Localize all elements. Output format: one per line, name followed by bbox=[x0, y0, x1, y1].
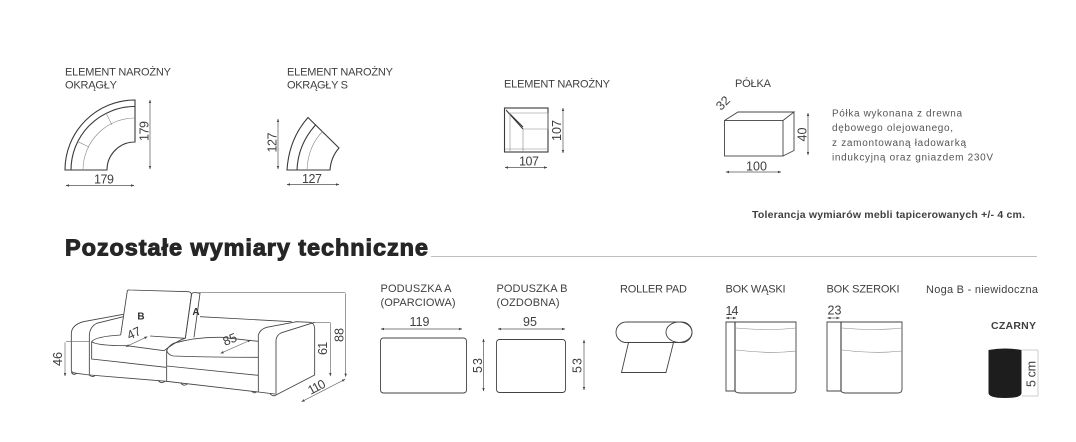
sofa dimension labels: 47 bbox=[125, 324, 143, 343]
dimension: height 40 bbox=[796, 113, 810, 155]
panel: polka bbox=[713, 77, 993, 174]
label: roller pad: ROLLER PAD bbox=[620, 284, 687, 296]
sofa dimension labels bbox=[51, 324, 346, 398]
drawing: round corner element S bbox=[287, 118, 339, 170]
panel: bok waski bbox=[726, 284, 796, 393]
drawing: corner element bbox=[504, 108, 548, 152]
dimension: width 100: 100 bbox=[746, 160, 767, 174]
section heading: Pozostałe wymiary techniczne bbox=[65, 234, 428, 260]
dimension: height 107: 107 bbox=[550, 120, 564, 141]
cushion letters bbox=[137, 307, 200, 322]
cushion letters: B bbox=[137, 311, 145, 322]
dimension: 23: 23 bbox=[828, 304, 842, 318]
panel: noga B bbox=[926, 284, 1039, 398]
sofa dimensions bbox=[65, 293, 346, 402]
shelf description: z zamontowaną ładowarką bbox=[832, 138, 966, 149]
dimension: 5 cm: 5 cm bbox=[1024, 361, 1038, 387]
label: polka: PÓŁKA bbox=[735, 77, 772, 90]
dimension: width 107: 107 bbox=[519, 154, 539, 168]
sofa dimension labels: 88 bbox=[332, 328, 346, 342]
label: poduszka A: PODUSZKA A bbox=[380, 283, 452, 295]
panel: element narozny bbox=[504, 78, 611, 168]
dimension: height 53: 53 bbox=[471, 358, 485, 373]
sofa outline bbox=[71, 290, 315, 396]
dimension: width 95: 95 bbox=[523, 315, 537, 329]
dimension: width 127: 127 bbox=[302, 172, 322, 186]
dimension: 14: 14 bbox=[726, 304, 739, 318]
sofa dimension labels: 110 bbox=[305, 377, 328, 398]
label: bok waski: BOK WĄSKI bbox=[726, 284, 786, 296]
drawing: roller pad bbox=[616, 322, 692, 372]
dimension: height 179: 179 bbox=[138, 121, 152, 141]
drawing: cushion B bbox=[496, 340, 566, 392]
drawing: shelf box bbox=[724, 112, 794, 156]
label: poduszka B: (OZDOBNA) bbox=[496, 297, 560, 309]
dimension: width 100 bbox=[726, 160, 781, 174]
sofa dimension labels: 61 bbox=[316, 342, 330, 355]
label: element narozny okragly bbox=[65, 66, 172, 92]
panel: element narozny okragly bbox=[65, 66, 172, 186]
dimension: height 40: 40 bbox=[796, 127, 810, 142]
shelf description: Półka wykonana z drewna bbox=[832, 108, 962, 120]
label: czarny: CZARNY bbox=[991, 320, 1036, 332]
shelf description bbox=[832, 108, 993, 164]
drawing: narrow side bbox=[726, 322, 796, 393]
sofa dimension labels: 85 bbox=[221, 331, 239, 349]
label: poduszka B bbox=[496, 283, 568, 309]
dimension: height 127: 127 bbox=[266, 132, 280, 152]
dimension: width 179: 179 bbox=[94, 172, 114, 186]
label: element narozny: ELEMENT NAROŻNY bbox=[504, 78, 611, 90]
sofa drawing with dimensions bbox=[51, 290, 346, 402]
drawing: wide side bbox=[827, 322, 902, 393]
dimension: depth 32: 32 bbox=[713, 93, 733, 113]
label: poduszka A bbox=[380, 283, 456, 309]
panel: poduszka A bbox=[380, 283, 485, 393]
icon: black leg bbox=[988, 348, 1022, 398]
tolerance note: Tolerancja wymiarów mebli tapicerowanych +/- 4 cm. bbox=[752, 209, 1025, 221]
panel: poduszka B bbox=[496, 283, 584, 392]
label: element narozny okragly: OKRĄGŁY bbox=[65, 80, 118, 92]
shelf description: dębowego olejowanego, bbox=[832, 123, 953, 134]
cushion letters: A bbox=[192, 307, 200, 318]
panel: bok szeroki bbox=[826, 284, 902, 393]
panel: element narozny okragly S bbox=[266, 66, 394, 186]
label: element narozny okragly S: ELEMENT NAROŻNY bbox=[287, 66, 394, 78]
panel: roller pad bbox=[616, 284, 692, 372]
label: bok szeroki: BOK SZEROKI bbox=[826, 284, 900, 296]
label: element narozny okragly: ELEMENT NAROŻNY bbox=[65, 66, 172, 78]
sofa dimension labels: 46 bbox=[51, 352, 65, 366]
dimension: width 119: 119 bbox=[410, 315, 430, 329]
label: poduszka B: PODUSZKA B bbox=[496, 283, 568, 295]
dimension: height 53: 53 bbox=[570, 358, 584, 373]
label: poduszka A: (OPARCIOWA) bbox=[380, 297, 456, 309]
label: element narozny okragly S bbox=[287, 66, 394, 92]
shelf description: indukcyjną oraz gniazdem 230V bbox=[832, 152, 993, 164]
label: noga B: Noga B - niewidoczna bbox=[926, 284, 1039, 296]
drawing: round corner element bbox=[65, 100, 135, 170]
drawing: cushion A bbox=[380, 338, 466, 393]
label: element narozny okragly S: OKRĄGŁY S bbox=[287, 80, 348, 92]
